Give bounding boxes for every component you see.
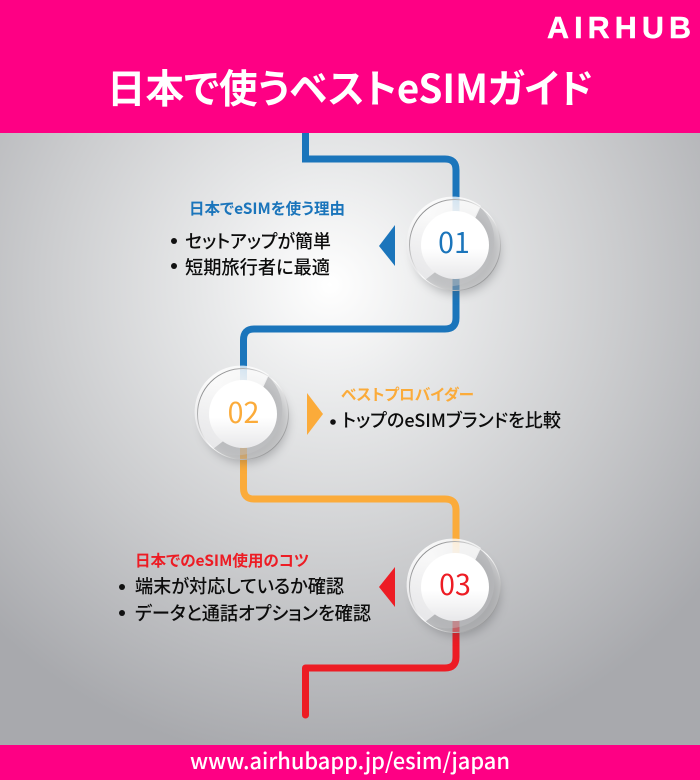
- footer band: [0, 744, 700, 780]
- step 1 bullets: [171, 228, 331, 280]
- step 2 dial: [195, 366, 289, 463]
- step 2 arrow: [307, 393, 323, 435]
- path: orange segment: [244, 440, 456, 560]
- number 02: 02: [228, 391, 259, 432]
- step 3 heading: 日本でのeSIM使用のコツ: [135, 549, 309, 571]
- step 3 bullets: [119, 573, 371, 626]
- step 2 bullet: トップのeSIMブランドを比較: [342, 407, 561, 433]
- step 1 arrow: [379, 225, 395, 266]
- step 1 text block: [171, 197, 345, 280]
- step 3 bullets: 端末が対応しているか確認: [135, 573, 344, 599]
- number 01: 01: [438, 221, 470, 262]
- step 1 heading: 日本でeSIMを使う理由: [189, 197, 345, 219]
- step 3 dial: [407, 539, 501, 636]
- step 3 text block: [119, 549, 371, 626]
- footer url: www.airhubapp.jp/esim/japan: [190, 744, 510, 776]
- step 2 text block: [330, 383, 561, 433]
- step 3 arrow: [379, 567, 395, 607]
- path: blue segment: [244, 133, 456, 385]
- step 3 bullets: データと通話オプションを確認: [135, 600, 371, 626]
- path: red segment: [306, 615, 456, 715]
- logo: AIRHUB: AIRHUB: [547, 11, 691, 45]
- step 1 bullets: 短期旅行者に最適: [185, 254, 330, 280]
- header band: [0, 0, 700, 133]
- title: 日本で使うベストeSIMガイド: [107, 58, 593, 115]
- step 2 heading: ベストプロバイダー: [341, 383, 474, 405]
- number 03: 03: [439, 563, 471, 604]
- step 1 bullets: セットアップが簡単: [185, 228, 331, 254]
- background: [0, 133, 700, 745]
- step 1 dial: [407, 197, 501, 294]
